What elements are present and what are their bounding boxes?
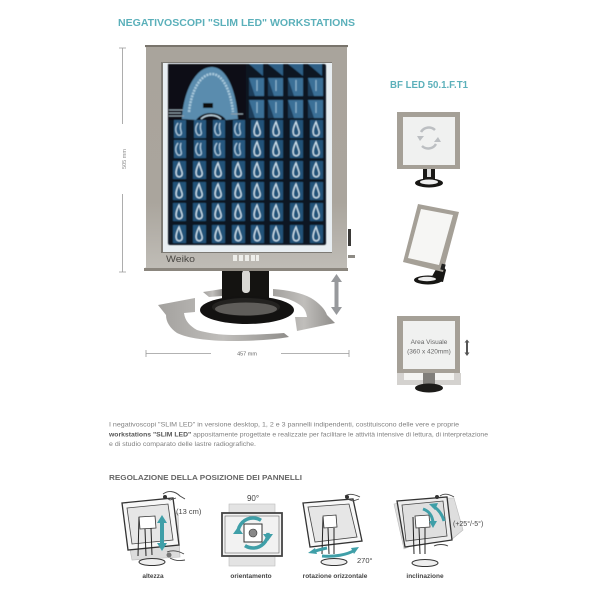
main light box monitor: [144, 45, 355, 324]
control buttons: [233, 255, 259, 261]
icon: altezza: [122, 492, 202, 580]
side view: visual area and height: [397, 316, 461, 392]
description text: I negativoscopi "SLIM LED" in versione desktop, 1, 2 e 3 pannelli indipendenti, costituiscono delle vere e proprie: [109, 422, 460, 428]
arrow: [157, 515, 167, 551]
width dimension: 457 mm: [146, 350, 349, 358]
side view: panel tilted: [403, 204, 459, 284]
label: tilt range: (+25°/-5°): [453, 520, 483, 528]
jaw scan: [168, 64, 246, 120]
caption: altezza: [142, 573, 164, 580]
label: 90 degrees: 90°: [247, 494, 259, 503]
area label: (360 x 420mm): [407, 348, 451, 356]
tile grid: [171, 64, 323, 243]
description text: workstations "SLIM LED" appositamente progettate e realizzate per facilitare le attività intensive di lettura, di interpretazione: [108, 432, 489, 438]
icon: orientamento: [222, 494, 282, 580]
icon: rotazione orizzontale: [303, 494, 373, 580]
description text: [108, 422, 489, 448]
brand logo: Weiko: [166, 254, 195, 264]
section heading: REGOLAZIONE DELLA POSIZIONE DEI PANNELLI: [109, 475, 302, 482]
rotation arrows around base: [158, 289, 335, 341]
side switches: [348, 229, 355, 258]
title: NEGATIVOSCOPI "SLIM LED" WORKSTATIONS: [118, 17, 355, 29]
x-ray film: [168, 64, 326, 245]
area label: Area Visuale: [411, 339, 448, 346]
height dimension: 505 mm: 505 mm: [122, 149, 128, 169]
icon: inclinazione: [394, 494, 483, 580]
side view: panel rotation: [397, 112, 460, 188]
small double arrow: [464, 340, 470, 356]
arrows: [423, 503, 444, 528]
rotate icon: [417, 128, 441, 148]
vertical double arrow: [331, 274, 342, 315]
caption: rotazione orizzontale: [303, 573, 368, 580]
frame: [144, 45, 348, 270]
model name: BF LED 50.1.F.T1: [390, 80, 468, 91]
caption: orientamento: [230, 573, 272, 580]
stand base: [200, 296, 294, 324]
caption: inclinazione: [406, 573, 444, 580]
height dimension: 505 mm: [119, 48, 128, 272]
label: 270 degrees: 270°: [357, 556, 373, 565]
stand neck: [222, 269, 269, 302]
width dimension: 457 mm: 457 mm: [237, 352, 257, 358]
label: 13 cm: (13 cm): [176, 507, 202, 516]
light panel: [163, 63, 332, 252]
arrows: [308, 547, 359, 556]
description text: e di studio comparato delle lastre radiografiche.: [109, 442, 256, 448]
